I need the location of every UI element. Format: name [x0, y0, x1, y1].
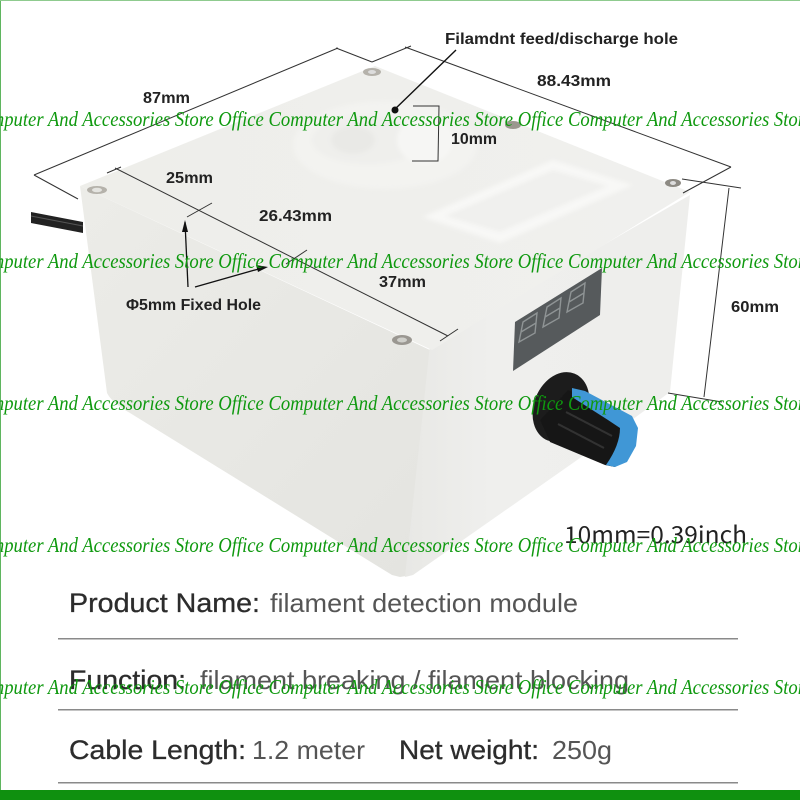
fixed-hole arrows	[182, 220, 268, 287]
spec row: function: Function:	[69, 665, 186, 695]
conversion note: 10mm=0.39inch	[564, 516, 747, 550]
footer bar	[0, 790, 800, 800]
spec row: cable length and net weight: 250g	[552, 735, 612, 765]
dimension 88.43mm	[372, 46, 731, 193]
dimension labels: 25mm	[166, 170, 213, 187]
dimension 60mm	[668, 179, 741, 402]
dimension labels: Filamdnt feed/discharge hole	[445, 31, 678, 48]
spec row: product name: filament detection module	[270, 588, 578, 618]
dimension lines	[34, 46, 741, 402]
spec row: cable length and net weight: 1.2 meter	[252, 735, 365, 765]
right face	[405, 195, 690, 577]
spec row: product name: Product Name:	[69, 588, 260, 618]
left face	[80, 186, 430, 577]
screws	[87, 68, 681, 345]
dimension 87mm	[34, 48, 372, 199]
spec row: cable length and net weight: Net weight:	[399, 735, 539, 765]
dimension 10mm	[412, 106, 439, 161]
product: filament detection module box	[80, 66, 690, 577]
dimension labels: 87mm	[143, 90, 190, 107]
dimension top-left 25 / 26.43 / 37	[107, 167, 458, 341]
top face	[80, 66, 690, 350]
top face recess: window	[423, 160, 633, 243]
dimension labels: 10mm	[451, 131, 497, 148]
watermark rows	[0, 107, 800, 699]
spec row: function: filament breaking / filament blocking	[200, 665, 629, 695]
spec row: cable length and net weight: Cable Length:	[69, 735, 246, 765]
spec row: function	[58, 665, 738, 710]
dimension labels: 60mm	[731, 299, 779, 316]
dimension labels	[126, 31, 779, 316]
spec row: cable length and net weight	[58, 735, 738, 784]
filament hole leader	[392, 50, 456, 114]
top face recess: filament hole	[293, 101, 477, 189]
spec row: product name	[58, 588, 738, 640]
LED display	[513, 268, 602, 371]
dimension labels: 26.43mm	[259, 208, 332, 225]
dimension labels: 37mm	[379, 274, 426, 291]
cable	[31, 212, 83, 233]
knob	[522, 364, 638, 467]
dimension labels: 88.43mm	[537, 73, 611, 90]
dimension labels: Φ5mm Fixed Hole	[126, 297, 261, 314]
